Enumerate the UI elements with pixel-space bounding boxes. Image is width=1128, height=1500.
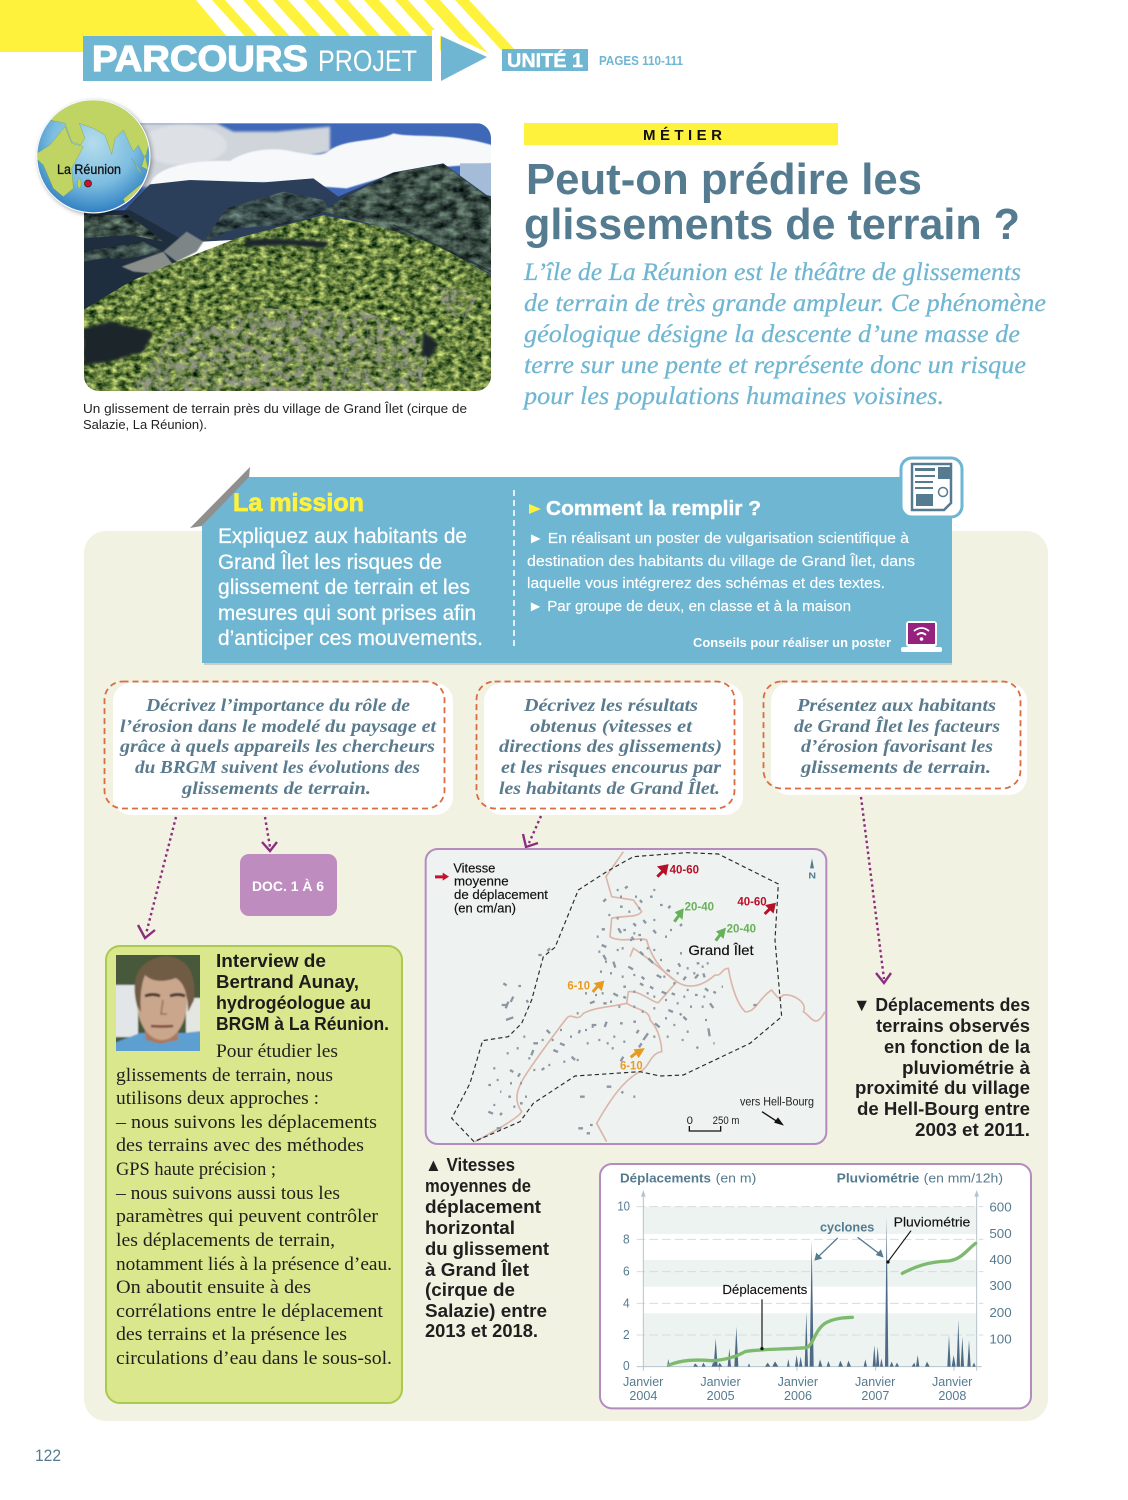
kicker: métier <box>524 123 838 145</box>
mission text: glissement de terrain et les <box>218 576 470 599</box>
interview text: glissements de terrain, nous <box>116 1065 333 1086</box>
panel: interview <box>106 946 402 1403</box>
task box 1: Décrivez l’importance du rôle de <box>145 695 410 715</box>
panel: project background <box>84 531 1048 1421</box>
axis titles: Pluviométrie <box>837 1171 919 1186</box>
task box 3: Présentez aux habitants <box>796 695 996 715</box>
left axis labels: 8 <box>623 1232 630 1246</box>
interview text: corrélations entre le déplacement <box>116 1301 384 1322</box>
task box 2 <box>476 682 743 815</box>
chart caption: 2003 et 2011. <box>915 1120 1030 1140</box>
axis titles: (en mm/12h) <box>924 1171 1003 1186</box>
how-to text: laquelle vous intégrerez des schémas et des textes. <box>527 576 885 592</box>
how-to heading: Comment la remplir ? <box>546 498 761 520</box>
task box 2: et les risques encourus par <box>501 757 722 777</box>
chart caption: proximité du village <box>855 1078 1030 1098</box>
buildings <box>488 886 757 1133</box>
interview text: notamment liés à la présence d’eau. <box>116 1254 392 1275</box>
interview text: circulations d’eau dans le sous-sol. <box>116 1348 392 1369</box>
interview heading <box>216 951 389 1034</box>
year labels: Janvier <box>623 1374 664 1389</box>
chart caption: terrains observés <box>876 1016 1030 1036</box>
yellow corner band <box>0 0 240 52</box>
velocity labels: 40-60 <box>737 895 767 909</box>
parcours projet band <box>83 36 432 81</box>
map caption: Salazie) entre <box>425 1301 547 1321</box>
interview text: On aboutit ensuite à des <box>116 1277 311 1298</box>
legend: de déplacement <box>454 888 548 902</box>
landscape photo <box>83 123 493 392</box>
velocity labels: 6-10 <box>620 1058 643 1072</box>
icon: poster <box>901 458 962 517</box>
axis titles <box>620 1171 1003 1186</box>
interview text: des terrains avec des méthodes <box>116 1135 364 1156</box>
page number: 122 <box>35 1446 61 1465</box>
year labels: Janvier <box>855 1374 896 1389</box>
parcours projet band: PROJET <box>318 45 417 78</box>
map caption: 2013 et 2018. <box>425 1321 538 1341</box>
left axis labels <box>617 1200 630 1373</box>
how-to text <box>527 531 915 615</box>
year labels: 2005 <box>707 1388 735 1403</box>
year labels: 2007 <box>861 1388 889 1403</box>
left axis labels: 6 <box>623 1265 630 1279</box>
kicker: métier: MÉTIER <box>643 127 722 144</box>
introduction: géologique désigne la descente d’une masse de <box>524 321 1020 348</box>
axes <box>637 1190 982 1371</box>
right axis labels: 300 <box>989 1279 1012 1293</box>
globe locator <box>33 95 153 215</box>
photo caption <box>83 401 467 432</box>
rainfall series <box>667 1217 976 1367</box>
arrow to chart caption <box>861 797 891 983</box>
arrow <box>441 36 487 81</box>
photo caption: Un glissement de terrain près du village de Grand Îlet (cirque de <box>83 401 467 416</box>
right axis labels: 100 <box>989 1333 1012 1347</box>
year labels: 2008 <box>938 1388 966 1403</box>
north marker: N <box>808 870 816 880</box>
mission text: mesures qui sont prises afin <box>218 602 476 625</box>
left axis labels: 0 <box>623 1359 630 1373</box>
mission text: Grand Îlet les risques de <box>218 551 442 574</box>
document reference button <box>240 854 337 916</box>
right axis labels: 400 <box>989 1253 1012 1267</box>
map caption: (cirque de <box>425 1280 515 1300</box>
document reference button: DOC. 1 À 6 <box>252 878 324 894</box>
axis titles: Déplacements <box>620 1171 711 1186</box>
chart caption: ▼ Déplacements des <box>853 995 1030 1015</box>
map caption: du glissement <box>425 1239 549 1259</box>
interview text <box>115 1041 392 1369</box>
village label: Grand Îlet <box>688 942 754 958</box>
map caption: moyennes de <box>425 1176 531 1196</box>
task box 2: obtenus (vitesses et <box>530 716 693 737</box>
legend: Vitesse <box>453 861 495 875</box>
how-to text: destination des habitants du village de Grand Îlet, dans <box>527 553 915 570</box>
task box 2: les habitants de Grand Îlet. <box>499 777 720 798</box>
legend: moyenne <box>454 875 509 889</box>
mission text: d’anticiper ces mouvements. <box>218 627 483 650</box>
introduction <box>522 259 1046 410</box>
year labels: Janvier <box>700 1374 741 1389</box>
unit tag: UNITÉ 1 <box>507 50 583 72</box>
icon: laptop <box>901 621 942 652</box>
velocity labels <box>567 863 774 1072</box>
chart: displacement and rainfall <box>600 1164 1031 1408</box>
velocity labels: 20-40 <box>685 900 714 914</box>
task box 2: Décrivez les résultats <box>523 695 698 715</box>
task box 1: grâce à quels appareils les chercheurs <box>119 736 435 756</box>
north marker <box>808 858 816 880</box>
task box 1: l’érosion dans le modelé du paysage et <box>120 716 437 736</box>
photo caption: Salazie, La Réunion). <box>83 417 207 432</box>
right axis labels: 200 <box>989 1306 1012 1320</box>
scale bar: 0 <box>687 1115 693 1127</box>
year labels <box>623 1374 973 1403</box>
scale bar <box>687 1115 739 1131</box>
introduction: de terrain de très grande ampleur. Ce phénomène <box>524 290 1046 317</box>
introduction: pour les populations humaines voisines. <box>522 383 944 410</box>
cyclones annotation <box>814 1219 884 1261</box>
task box 1 <box>104 682 453 815</box>
year labels: 2006 <box>784 1388 812 1403</box>
chart caption: en fonction de la <box>884 1037 1031 1057</box>
mission heading: La mission <box>233 489 364 517</box>
right axis labels: 500 <box>989 1227 1012 1241</box>
task box 3: de Grand Îlet les facteurs <box>794 715 1000 736</box>
interview text: GPS haute précision ; <box>116 1159 276 1180</box>
displacement curve <box>669 1243 976 1365</box>
chart caption: de Hell-Bourg entre <box>857 1099 1030 1119</box>
map caption <box>425 1155 549 1341</box>
scale bar: 250 m <box>713 1115 739 1127</box>
study area boundary <box>452 853 782 1142</box>
chart bands <box>643 1207 977 1367</box>
arrow to map <box>523 816 541 847</box>
roads <box>475 852 825 1142</box>
page reference: PAGES 110-111 <box>599 53 683 68</box>
header banner <box>0 0 683 85</box>
chart caption <box>853 995 1031 1140</box>
mission text <box>218 525 483 650</box>
task box 1: glissements de terrain. <box>181 778 371 798</box>
task box 1: du BRGM suivent les évolutions des <box>135 757 420 777</box>
right axis labels: 600 <box>989 1200 1012 1214</box>
interview text: les déplacements de terrain, <box>116 1230 335 1251</box>
mission text: Expliquez aux habitants de <box>218 525 467 548</box>
interview text: – nous suivons aussi tous les <box>115 1183 340 1204</box>
arrow to interview <box>138 817 176 938</box>
title: Peut-on prédire les <box>526 155 922 204</box>
portrait photo <box>114 953 202 1053</box>
map: Grand Îlet displacement <box>426 849 826 1144</box>
panel: mission <box>190 458 962 664</box>
parcours projet band: PARCOURS <box>92 38 308 79</box>
map caption: horizontal <box>425 1218 515 1238</box>
cyclones annotation: cyclones <box>820 1219 874 1234</box>
velocity labels: 40-60 <box>670 863 699 877</box>
left axis labels: 10 <box>617 1200 630 1214</box>
legend <box>435 861 548 916</box>
photo shadows <box>83 238 438 365</box>
interview heading: Interview de <box>216 951 326 971</box>
interview heading: BRGM à La Réunion. <box>216 1014 389 1034</box>
year labels: Janvier <box>932 1374 973 1389</box>
left axis labels: 2 <box>623 1328 630 1342</box>
left axis labels: 4 <box>623 1296 630 1310</box>
legend: (en cm/an) <box>454 902 516 916</box>
title <box>524 155 1020 249</box>
interview text: des terrains et la présence les <box>116 1324 347 1345</box>
axis titles: (en m) <box>716 1171 756 1186</box>
pluviométrie annotation: Pluviométrie <box>894 1215 970 1230</box>
interview text: utilisons deux approches : <box>116 1088 319 1109</box>
task box 2: directions des glissements) <box>499 736 722 757</box>
introduction: terre sur une pente et représente donc un risque <box>524 352 1026 379</box>
velocity labels: 20-40 <box>727 922 756 936</box>
task box 3: d’érosion favorisant les <box>801 736 993 756</box>
task box 3: glissements de terrain. <box>800 757 991 777</box>
task box 3 <box>764 682 1027 795</box>
year labels: 2004 <box>629 1388 658 1403</box>
direction to Hell-Bourg <box>740 1094 814 1126</box>
interview text: – nous suivons les déplacements <box>115 1112 377 1133</box>
direction to Hell-Bourg: vers Hell-Bourg <box>740 1094 814 1108</box>
right axis labels <box>989 1200 1012 1347</box>
velocity labels: 6-10 <box>567 978 590 992</box>
interview text: Pour étudier les <box>216 1041 338 1062</box>
title: glissements de terrain ? <box>524 200 1020 249</box>
online resource link: Conseils pour réaliser un poster <box>693 635 891 650</box>
diagonal stripes <box>212 0 518 53</box>
interview text: paramètres qui peuvent contrôler <box>116 1206 379 1227</box>
déplacements annotation: Déplacements <box>722 1282 808 1297</box>
interview heading: hydrogéologue au <box>216 993 371 1013</box>
map caption: ▲ Vitesses <box>425 1155 515 1175</box>
how-to text: ► En réalisant un poster de vulgarisation scientifique à <box>528 531 910 547</box>
how-to text: ► Par groupe de deux, en classe et à la maison <box>528 599 851 615</box>
map caption: à Grand Îlet <box>425 1259 529 1280</box>
déplacements annotation <box>722 1282 808 1350</box>
arrow to documents <box>262 817 277 851</box>
pluviométrie annotation <box>886 1215 970 1264</box>
chart caption: pluviométrie à <box>902 1058 1031 1078</box>
introduction: L’île de La Réunion est le théâtre de glissements <box>523 259 1021 286</box>
map caption: déplacement <box>425 1197 541 1217</box>
globe label: La Réunion <box>57 161 121 177</box>
year labels: Janvier <box>778 1374 819 1389</box>
interview heading: Bertrand Aunay, <box>216 972 359 992</box>
